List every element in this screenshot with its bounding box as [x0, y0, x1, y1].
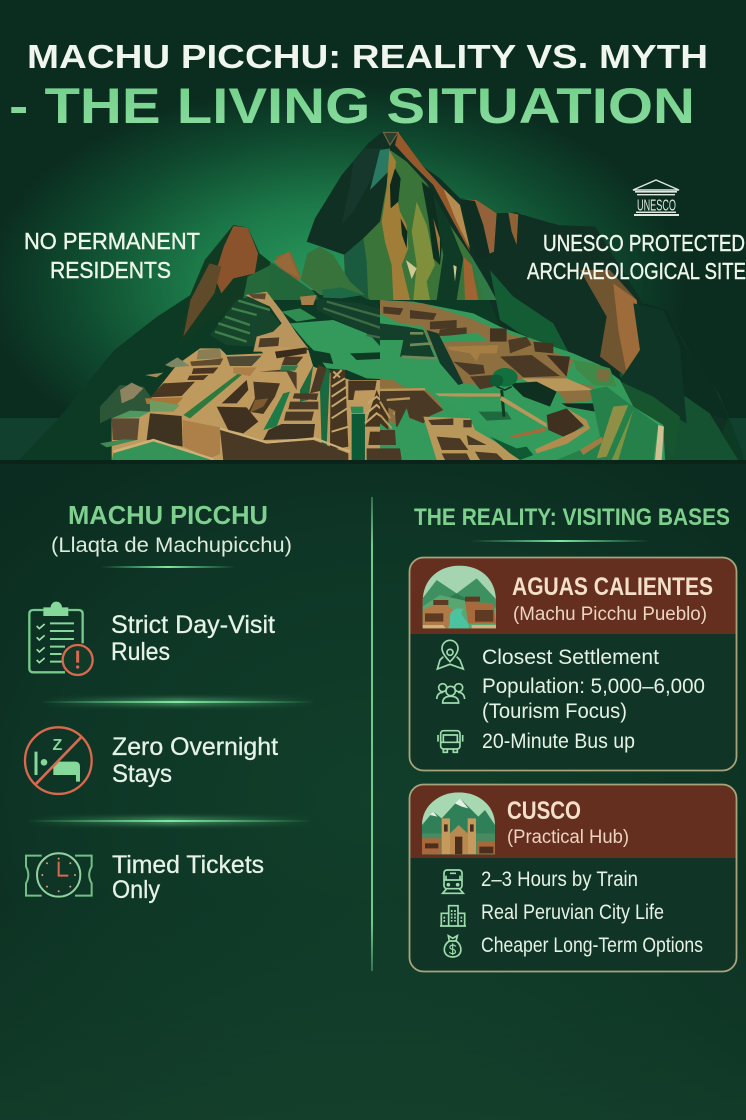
- callout: no permanent residents: [24, 228, 200, 283]
- text: timed tickets only: Only: [112, 876, 160, 904]
- text: strict day-visit rules: Strict Day-Visit: [111, 611, 275, 639]
- text: timed tickets only: Timed Tickets: [112, 851, 264, 879]
- callout: no permanent residents: RESIDENTS: [50, 257, 171, 283]
- callout: UNESCO protected: [527, 230, 746, 284]
- icon: UNESCO temple: [633, 180, 679, 216]
- text: bus: 20-Minute Bus up: [482, 730, 635, 753]
- thumbnail: Cusco cathedral: [420, 791, 497, 856]
- back ridge and mountains: [19, 215, 743, 460]
- text: city life: Real Peruvian City Life: [481, 901, 664, 924]
- title line 2: - THE LIVING SITUATION: [9, 78, 695, 134]
- text: population: (Tourism Focus): [482, 700, 627, 723]
- icon: no overnight stays: Z: [52, 737, 62, 754]
- card: Cusco: [409, 784, 737, 972]
- label: Aguas Calientes: AGUAS CALIENTES: [512, 573, 713, 601]
- left peak: [179, 225, 305, 347]
- icon: no overnight stays: [25, 727, 92, 794]
- subheading: Llaqta de Machupicchu: (Llaqta de Machupicchu): [51, 534, 292, 557]
- text: population: Population: 5,000–6,000: [482, 675, 705, 698]
- label: Cusco: CUSCO: [507, 797, 581, 825]
- icon: clipboard with warning: [29, 602, 93, 675]
- text: closest settlement: Closest Settlement: [482, 646, 659, 669]
- icon: money bag: [444, 936, 461, 957]
- icon: people: [437, 684, 465, 703]
- label: Machu Picchu Pueblo: (Machu Picchu Pueblo): [513, 604, 707, 625]
- illustration base shadow: [0, 460, 746, 463]
- thumbnail: Aguas Calientes town: [422, 566, 496, 628]
- main peak: [270, 132, 603, 300]
- text: zero overnight stays: [112, 733, 278, 788]
- card: Aguas Calientes: [409, 557, 737, 771]
- icon: bus: [438, 731, 463, 752]
- panel: visiting bases: [409, 504, 737, 972]
- icon: map pin: [437, 640, 463, 669]
- title: [9, 38, 708, 134]
- icon: timed ticket: [26, 853, 92, 897]
- text: timed tickets only: [112, 851, 264, 904]
- label: Practical Hub: (Practical Hub): [507, 827, 629, 848]
- ruins right: [380, 300, 665, 460]
- text: zero overnight stays: Zero Overnight: [112, 733, 278, 761]
- panel: Machu Picchu rules: [25, 500, 315, 904]
- ruins left: [100, 292, 400, 461]
- text: strict day-visit rules: [111, 611, 275, 666]
- title line 1: MACHU PICCHU: REALITY VS. MYTH: [27, 38, 708, 75]
- icon: city: [440, 906, 466, 926]
- icon: train: [443, 870, 463, 893]
- heading: Machu Picchu: MACHU PICCHU: [68, 500, 268, 530]
- callout: no permanent residents: NO PERMANENT: [24, 228, 200, 254]
- right mountain facets: [490, 270, 687, 460]
- icon: UNESCO temple: UNESCO: [637, 198, 676, 214]
- illustration: Machu Picchu mountain and ruins: [0, 132, 746, 463]
- text: train: 2–3 Hours by Train: [481, 868, 638, 891]
- text: cheaper options: Cheaper Long-Term Options: [481, 934, 703, 957]
- text: strict day-visit rules: Rules: [111, 638, 170, 666]
- text: zero overnight stays: Stays: [112, 760, 172, 788]
- text: population: [482, 675, 705, 723]
